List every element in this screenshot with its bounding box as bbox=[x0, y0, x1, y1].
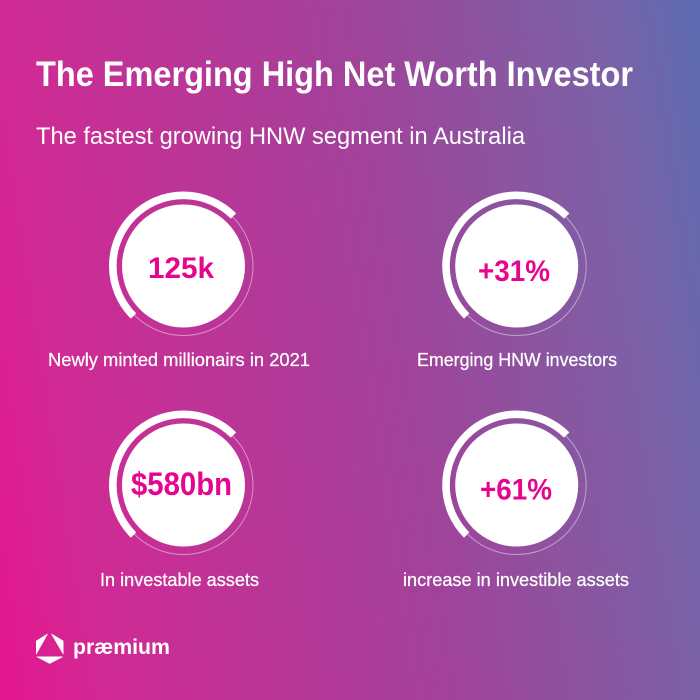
thick progress arc bbox=[113, 195, 234, 316]
white disc bbox=[455, 424, 578, 546]
white disc bbox=[122, 204, 245, 328]
thin progress ring bbox=[114, 416, 253, 554]
value: 125k bbox=[148, 252, 214, 285]
value: +31% bbox=[478, 255, 550, 288]
thick progress arc bbox=[113, 414, 234, 535]
thin progress ring bbox=[447, 416, 586, 554]
icon: hexagon mark bbox=[36, 634, 63, 664]
stat: +61% investible assets bbox=[403, 414, 629, 590]
caption: Newly minted millionairs in 2021 bbox=[48, 350, 310, 370]
subtitle: The fastest growing HNW segment in Australia bbox=[36, 123, 526, 150]
caption: In investable assets bbox=[100, 570, 259, 590]
caption: Emerging HNW investors bbox=[417, 350, 617, 370]
stat: +31% emerging HNW investors bbox=[417, 195, 617, 370]
thin progress ring bbox=[114, 196, 253, 336]
thick progress arc bbox=[446, 195, 567, 316]
white disc bbox=[122, 424, 245, 546]
thin progress ring bbox=[447, 196, 586, 336]
title: The Emerging High Net Worth Investor bbox=[36, 54, 633, 94]
logo: praemium bbox=[36, 634, 170, 664]
stat: 125k newly minted millionaires bbox=[48, 195, 310, 370]
wordmark: præmium bbox=[73, 635, 170, 659]
value: +61% bbox=[480, 474, 552, 506]
caption: increase in investible assets bbox=[403, 570, 629, 590]
value: $580bn bbox=[131, 466, 232, 502]
thick progress arc bbox=[446, 414, 567, 535]
white disc bbox=[455, 204, 578, 328]
stat: $580bn investable assets bbox=[100, 414, 259, 590]
